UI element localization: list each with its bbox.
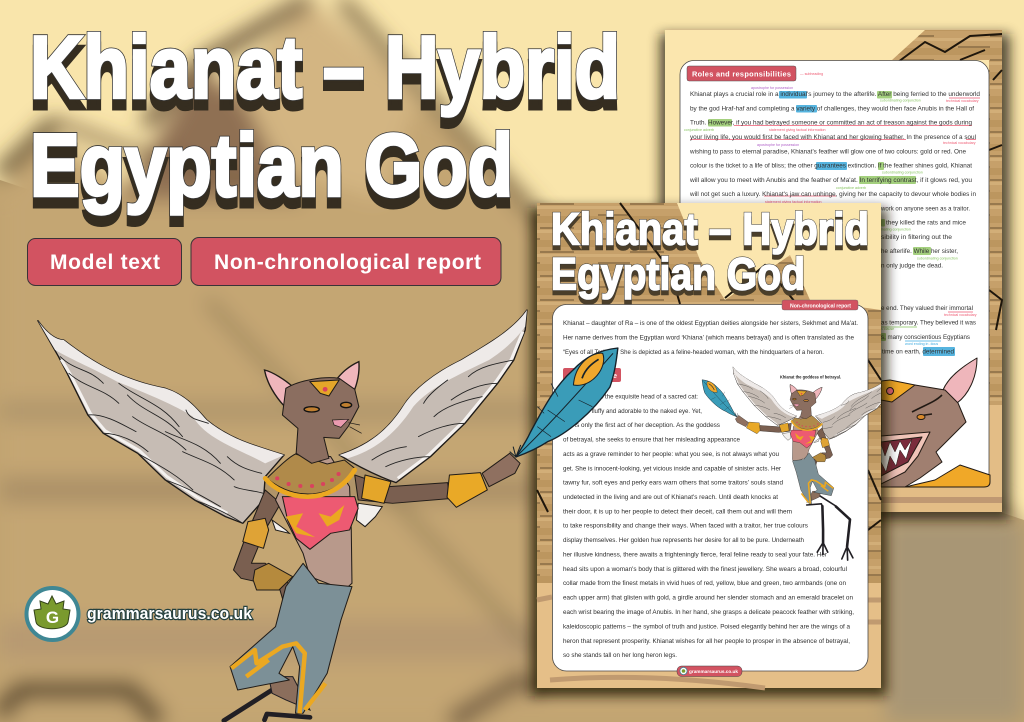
skirt	[230, 563, 352, 713]
torso and neck	[276, 453, 352, 590]
body text of front page: tawny fur, soft eyes and perky ears warn others that some traitors' souls stand	[563, 480, 784, 487]
body text of front page: kaleidoscopic patterns – the symbol of truth and justice. Poised elegantly behind her are the wings of a	[563, 624, 851, 631]
body text of front page: this is only the first act of her deception. As the goddess	[563, 422, 720, 429]
annotations on back page: s clause	[881, 327, 894, 331]
title: Khianat – Hybrid	[30, 18, 620, 116]
body text of back page: your living life, you would first be faced with Khianat and her glowing feather. In the presence of a soul	[690, 134, 976, 141]
body text of back page: will not get such a luxury. Khianat's jaw can unhinge, giving her the capacity to devour whole bodies in	[689, 191, 977, 198]
illustration: snarling Khianat head	[881, 358, 990, 487]
body text of back page: s, many conscientious Egyptians	[881, 334, 970, 341]
annotations on back page: technical vocabulary	[944, 313, 977, 317]
feather	[510, 348, 618, 457]
annotations on back page	[684, 72, 979, 346]
white tail feathers	[272, 503, 382, 533]
body text of front page: to take responsibility and change their ways. When faced with a traitor, her true colours	[563, 523, 808, 530]
body text of front page: of betrayal, she seeks to ensure that her misleading appearance	[563, 436, 741, 443]
body text of front page: each wrist bearing the image of Anubis. In her hand, she grasps a delicate peacock feather with striking,	[563, 609, 854, 616]
pink top	[282, 497, 358, 549]
body text of front page: each upper arm) that glisten with gold, a girdle around her slender stomach and an emerald bracelet on	[563, 595, 854, 602]
annotations on back page: subordinating conjunction	[882, 170, 923, 174]
body text of back page: work on anyone seen as a traitor.	[880, 206, 970, 213]
annotations on back page: word ending in -tious	[905, 342, 938, 346]
body text of back page: they killed the rats and mice	[886, 220, 967, 227]
front page title: Khianat – Hybrid	[551, 204, 869, 254]
body text of back page: by the god Hraf-haf and completing a variety of challenges, they would then face Anubis in the Hall of	[690, 106, 974, 112]
annotations on back page: statement giving factual information	[769, 128, 826, 132]
annotations on back page: apostrophe for possession	[751, 86, 793, 90]
legs	[224, 677, 310, 721]
logo: grammarsaurus: grammarsaurus.co.uk	[87, 604, 252, 623]
left wing	[38, 321, 284, 523]
body text of back page: wishing to pass to eternal paradise, Khianat's feather will glow one of two colours: gold or red. One	[689, 148, 967, 156]
body text of front page	[563, 320, 858, 659]
body text of back page: sibility in filtering out the	[881, 234, 953, 241]
annotations on back page: technical vocabulary	[946, 99, 979, 103]
front page: non-chronological report	[531, 203, 899, 696]
body text of front page: get. She is innocent-looking, yet vicious inside and capable of sinister acts. Her	[563, 465, 781, 472]
annotations on back page: technical vocabulary	[943, 141, 976, 145]
annotations on back page: subordinating conjunction	[880, 98, 921, 102]
body text of front page: it appears fluffy and adorable to the naked eye. Yet,	[563, 408, 702, 415]
body text of back page: he afterlife. While her sister,	[881, 248, 958, 255]
footer pill: grammarsaurus: grammarsaurus.co.uk	[689, 669, 738, 675]
body text of back page: e end. They valued their immortal	[881, 305, 973, 312]
body text of front page: head sits upon a woman's body that is glittered with the finest jewellery. She wears a broad, colourful	[563, 566, 847, 573]
body text of back page: Truth. However, if you had betrayed someone or committed an act of treason against the gods during	[690, 120, 973, 127]
head	[264, 362, 362, 463]
front page title	[551, 204, 869, 304]
back page: annotated roles and responsibilities	[660, 30, 1010, 520]
body text of back page: time on earth, determined	[882, 349, 955, 356]
annotations on back page: apostrophe for possession	[757, 143, 799, 147]
right wing	[339, 310, 527, 483]
body text of back page: will allow you to meet with Anubis and the feather of Ma'at. In terrifying contrast, if it glows red, you	[689, 177, 973, 184]
subheading badge: roles and responsibilities: Roles and responsibilities	[692, 70, 791, 78]
title: Khianat – Hybrid	[30, 18, 620, 116]
annotations on back page: subordinating conjunction	[917, 256, 958, 260]
subheading badge: roles and responsibilities	[687, 66, 796, 81]
caption: small illustration: Khianat the goddess of betrayal.	[780, 374, 841, 380]
front page title: Egyptian God	[551, 248, 805, 300]
body text of front page: “Eyes of all Traitors”. She is depicted as a feline-headed woman, with the hindquarters of a heron.	[563, 349, 824, 356]
body text of front page: display themselves. Her golden hue represents her desire for all to be pure. Underneath	[563, 537, 805, 544]
annotations on back page: conjunctive adverb	[684, 128, 714, 132]
body text of front page: collar made from the finest metals in vivid hues of red, yellow, blue and green, two armbands (one on	[563, 580, 847, 587]
body text of front page: heron that represent prosperity. Khianat wishes for all her people to prosper in the absence of betrayal,	[563, 638, 850, 645]
illustration: large Khianat figure with feather	[38, 310, 618, 721]
annotations on back page: — subheading	[800, 72, 823, 76]
badge: front page report label	[782, 300, 858, 310]
other arm	[234, 490, 315, 638]
highlights on back page	[690, 91, 980, 356]
title: Egyptian God	[30, 116, 513, 214]
badge: appearance subheading	[563, 368, 621, 382]
title: Egyptian God	[30, 126, 513, 225]
title: Khianat – Hybrid	[30, 28, 620, 127]
front page title: Khianat – Hybrid	[551, 204, 869, 254]
body text of front page: Khianat – daughter of Ra – is one of the oldest Egyptian deities alongside her sisters, Sekhmet and Ma'at.	[563, 320, 858, 327]
front page title: Egyptian God	[551, 248, 805, 300]
body text of back page: n only judge the dead.	[881, 263, 943, 270]
annotations on back page: conjunctive adverb	[836, 186, 866, 190]
annotations on back page: statement giving factual information	[765, 200, 822, 204]
body text of back page: as temporary. They believed it was	[881, 320, 976, 327]
arm with feather hand	[355, 453, 520, 507]
body text of front page: so she stands tall on her long heron legs.	[563, 652, 677, 659]
body text of front page: undetected in the living and are out of Khianat's reach. Until death knocks at	[563, 494, 778, 501]
front page white panel	[552, 304, 868, 671]
body text of back page: colour is the ticket to a life of bliss; the other guarantees extinction. If the feather shines gold, Khianat	[690, 163, 972, 170]
body text of front page: Her name derives from the Egyptian word ‘Khiana’ (which means betrayal) and is often translated as the	[563, 334, 855, 342]
badge: non-chronological report: Non-chronological report	[214, 251, 481, 274]
annotations on back page: inating conjunction	[881, 228, 911, 232]
body text of front page: her illusive kindness, there awaits a frighteningly fierce, feral feline ready to seal your fate. Her	[563, 552, 827, 559]
title: Egyptian God	[30, 116, 513, 214]
front page title: Egyptian God	[551, 253, 805, 304]
front page title: Khianat – Hybrid	[551, 208, 869, 259]
logo: grammarsaurus: G	[46, 608, 59, 627]
body text of back page: Khianat plays a crucial role in a individual's journey to the afterlife. After being ferried to the underworld	[690, 91, 981, 98]
body text of front page: Khianat boasts the exquisite head of a sacred cat:	[563, 394, 698, 401]
badge: model text	[28, 238, 182, 286]
skirt gold trim	[231, 643, 325, 713]
footer pill: grammarsaurus	[677, 666, 742, 676]
body text of back page	[689, 91, 981, 356]
badge: model text: Model text	[50, 251, 160, 274]
body text of front page: acts as a grave reminder to her people: what you see, is not always what you	[563, 451, 780, 458]
body text of front page: their door, it is up to her people to detect their deceit, call them out and will them	[563, 508, 792, 515]
badge: front page report label: Non-chronological report	[790, 303, 851, 309]
title	[30, 18, 620, 225]
badge: non-chronological report	[191, 238, 501, 286]
badge: appearance subheading: Appearance	[570, 371, 617, 380]
illustration: small Khianat figure	[702, 367, 899, 560]
collar	[265, 454, 355, 497]
logo: grammarsaurus	[26, 588, 252, 640]
